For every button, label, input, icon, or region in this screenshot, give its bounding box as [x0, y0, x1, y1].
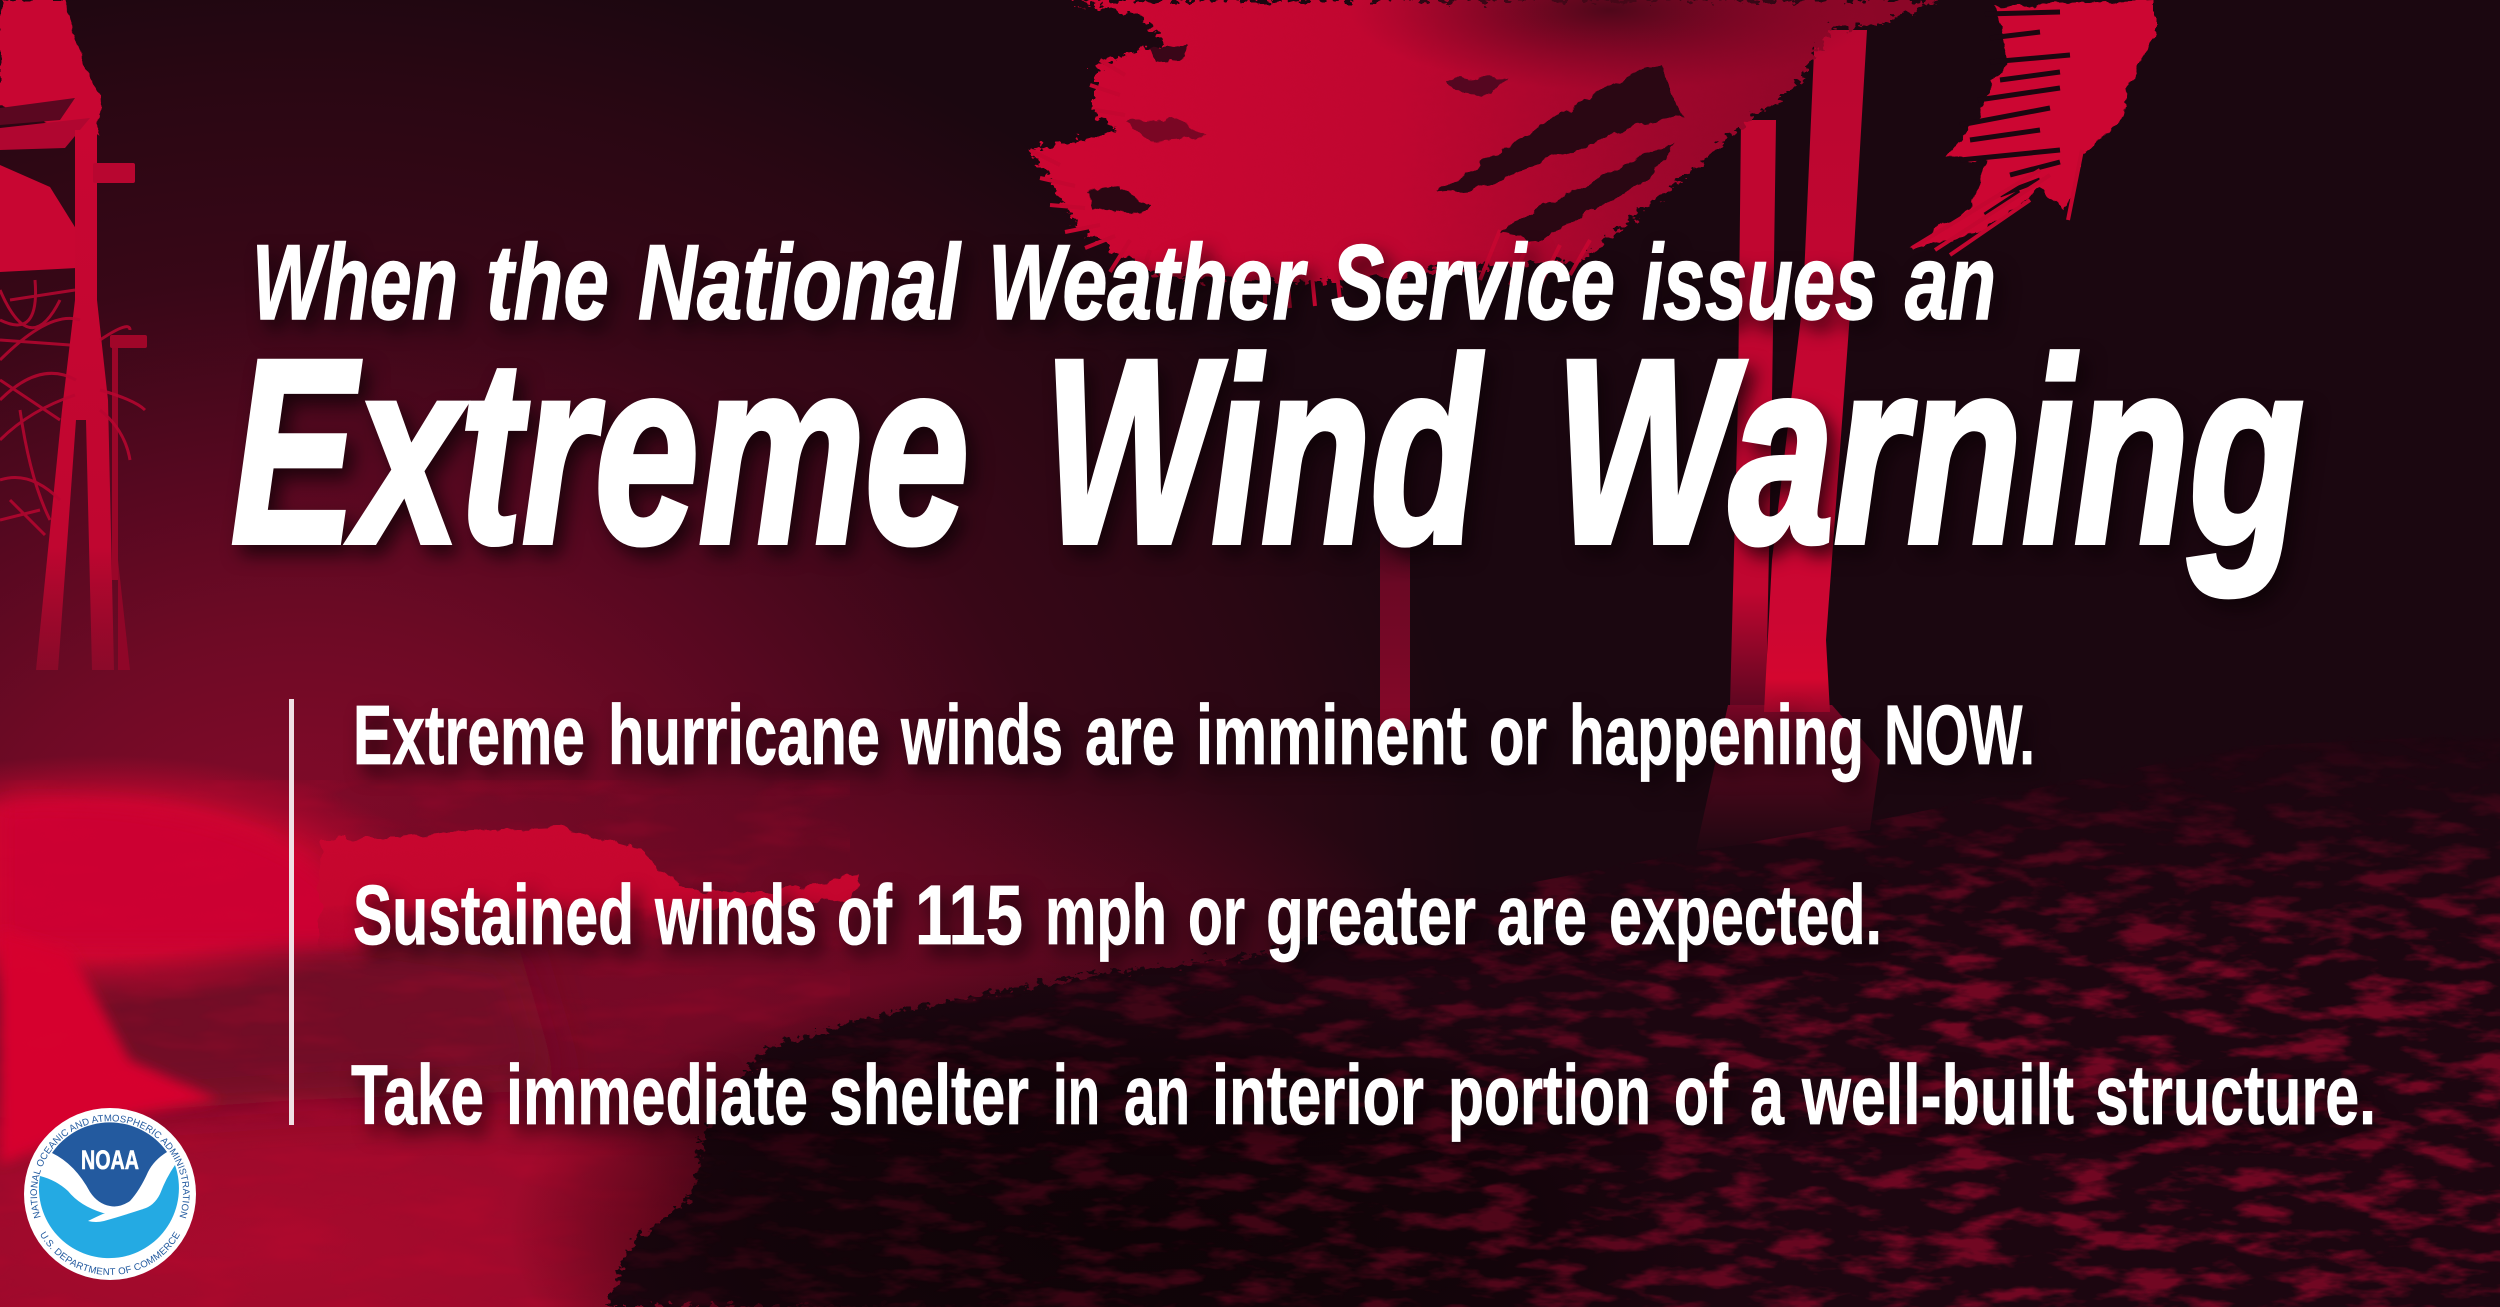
bullet: take shelter: interior — [1212, 1048, 1424, 1142]
palm tree: dark gaps between fronds — [1085, 43, 1684, 240]
heading: Extreme Wind Warning: Wind — [1044, 305, 1485, 598]
bullet: extreme winds imminent: Extreme — [353, 688, 585, 782]
bullet: extreme winds imminent: winds — [900, 688, 1063, 782]
reflection under palm trunks — [1696, 705, 1880, 850]
bullet: sustained winds — [353, 868, 1882, 962]
icon: NOAA logo — [24, 1108, 196, 1280]
bullet: sustained winds: 115 — [915, 868, 1023, 962]
bullet: extreme winds imminent — [353, 688, 2035, 782]
bullet: sustained winds: are — [1497, 868, 1587, 962]
heading: Extreme Wind Warning — [231, 305, 2304, 599]
background photo: fallen palm frond — [320, 828, 861, 950]
bullet: take shelter: shelter — [829, 1048, 1029, 1142]
bullet: take shelter: a — [1750, 1048, 1785, 1142]
palm: darkened upper centre — [1350, 0, 1870, 90]
vertical divider — [289, 699, 294, 1125]
heading: intro line: Service — [1331, 222, 1615, 342]
bullet: sustained winds: mph — [1045, 868, 1167, 962]
bullet: sustained winds: expected. — [1609, 868, 1882, 962]
background photo: dark water with ripples — [510, 720, 2500, 1307]
bullet: take shelter: portion — [1448, 1048, 1651, 1142]
bullet: extreme winds imminent: hurricane — [608, 688, 880, 782]
heading: intro line: issues — [1642, 222, 1877, 342]
palm: fine frond tips — [1030, 60, 1590, 310]
palm tree: trunks — [1730, 30, 1867, 712]
left tree and utility poles — [0, 0, 147, 670]
heading: intro line: the — [486, 222, 609, 342]
logo: ring text bottom: U.S. DEPARTMENT OF COMMERCE — [40, 1231, 180, 1275]
bullet: extreme winds imminent: or — [1489, 688, 1547, 782]
bullet: extreme winds imminent: happening — [1569, 688, 1864, 782]
heading: intro line — [252, 222, 1996, 342]
bullet: extreme winds imminent: imminent — [1196, 688, 1467, 782]
bullet: sustained winds: Sustained — [353, 868, 634, 962]
logo: dark blue sky — [52, 1122, 167, 1206]
bullet: extreme winds imminent: are — [1085, 688, 1175, 782]
right frond: tail strands — [1912, 150, 2082, 255]
bullet: sustained winds: winds — [654, 868, 817, 962]
bullet: take shelter: in — [1053, 1048, 1100, 1142]
palm tree: main fronds — [1030, 0, 1939, 310]
bullet: extreme winds imminent: NOW. — [1884, 688, 2035, 782]
left tree: bare branches — [0, 280, 145, 535]
heading: intro line: When — [252, 222, 458, 342]
bullet: sustained winds: greater — [1266, 868, 1476, 962]
bullet: sustained winds: of — [837, 868, 893, 962]
bullet: take shelter: Take — [351, 1048, 484, 1142]
heading: Extreme Wind Warning: Extreme — [231, 305, 969, 598]
logo: light blue sea — [39, 1165, 179, 1258]
bullet: take shelter: structure. — [2095, 1048, 2376, 1142]
bullet: take shelter: an — [1124, 1048, 1190, 1142]
bullet: take shelter: immediate — [506, 1048, 808, 1142]
logo: ring text top: NATIONAL OCEANIC AND ATMOSPHERIC ADMINISTRATION — [30, 1114, 190, 1218]
bullet: take shelter: of — [1674, 1048, 1729, 1142]
heading: intro line: National — [638, 222, 962, 342]
background photo: red shoreline at left — [0, 740, 950, 1307]
heading: intro line: an — [1905, 222, 1996, 342]
heading: intro line: Weather — [988, 222, 1308, 342]
palm tree: right frond — [1907, 0, 2154, 255]
bullet: take shelter — [351, 1048, 2376, 1142]
bullet: sustained winds: or — [1188, 868, 1245, 962]
right frond: dark slits — [1960, 12, 2070, 215]
logo: NOAA wordmark: NOAA — [81, 1145, 139, 1175]
palm tree: far trunk — [1380, 480, 1410, 730]
bullet: take shelter: well-built — [1801, 1048, 2074, 1142]
logo: white bird tail — [88, 1208, 143, 1222]
